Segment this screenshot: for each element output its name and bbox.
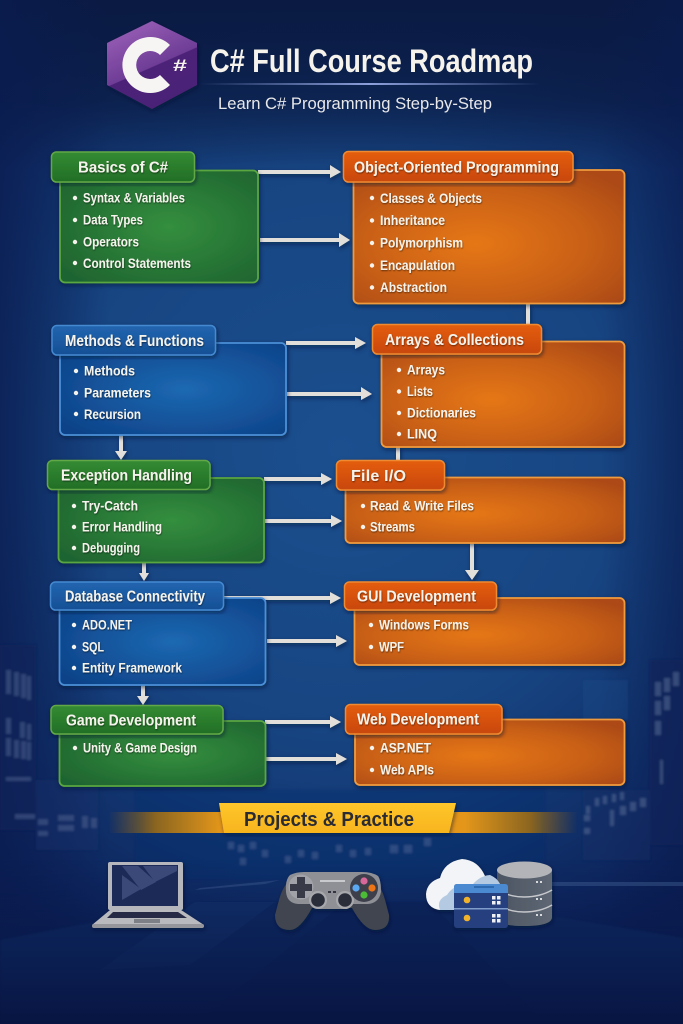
- list: Object-Oriented Programming: Abstraction: [380, 280, 447, 295]
- list: Basics of C#: Data Types: [83, 212, 143, 228]
- list: Arrays & Collections: Arrays: [407, 362, 445, 378]
- panel: GUI Development: [344, 582, 624, 665]
- panel: Methods & Functions: [52, 326, 286, 435]
- icon: laptop: [92, 862, 204, 928]
- list: Methods & Functions: Recursion: [84, 407, 141, 422]
- list: Arrays & Collections: Lists: [407, 384, 433, 399]
- icon: cloud, server and database: [426, 859, 552, 928]
- heading: Database Connectivity: [50, 582, 224, 610]
- panel: Database Connectivity: [50, 582, 266, 685]
- heading: Database Connectivity: Database Connectivity: [65, 588, 205, 606]
- panel: Basics of C#: [52, 152, 258, 282]
- heading: Web Development: [346, 704, 502, 734]
- panel: Arrays & Collections: [372, 324, 624, 447]
- list: Database Connectivity: ADO.NET: [82, 618, 133, 632]
- list: Object-Oriented Programming: Classes & Objects: [380, 191, 482, 206]
- list: File I/O: Streams: [370, 520, 415, 534]
- list: Basics of C#: Syntax & Variables: [83, 190, 185, 206]
- list: Database Connectivity: SQL: [82, 640, 104, 654]
- panel: File I/O: [336, 460, 624, 543]
- header: title and logo: [107, 21, 540, 113]
- list: File I/O: [361, 498, 474, 534]
- list: Object-Oriented Programming: Encapulation: [380, 258, 455, 273]
- list: Arrays & Collections: LINQ: [407, 426, 437, 442]
- heading: Object-Oriented Programming: Object-Oriented Programming: [354, 160, 559, 176]
- heading: Exception Handling: [48, 460, 210, 490]
- list: Web Development: ASP.NET: [380, 740, 432, 756]
- heading: Web Development: Web Development: [357, 712, 480, 728]
- heading: Object-Oriented Programming: [344, 152, 573, 182]
- icon: C# hexagon logo: #: [173, 56, 188, 75]
- list: Methods & Functions: Parameters: [84, 386, 151, 400]
- banner: Projects & Practice: [108, 803, 578, 833]
- heading: File I/O: File I/O: [351, 468, 406, 485]
- heading: Basics of C#: [52, 152, 194, 182]
- icon: cloud: [426, 859, 500, 910]
- list: Game Development: Unity & Game Design: [83, 740, 197, 756]
- list: Exception Handling: [72, 498, 162, 556]
- heading: Game Development: [51, 706, 223, 734]
- list: Arrays & Collections: [397, 362, 476, 442]
- heading: File I/O: [336, 460, 444, 490]
- list: Database Connectivity: [72, 618, 182, 676]
- heading: Game Development: Game Development: [66, 712, 197, 730]
- list: Arrays & Collections: Dictionaries: [407, 406, 476, 420]
- heading: Methods & Functions: Methods & Functions: [65, 333, 204, 350]
- icon: database cylinder: [497, 862, 552, 926]
- list: GUI Development: WPF: [379, 640, 404, 654]
- list: Basics of C#: Control Statements: [83, 256, 191, 271]
- list: Object-Oriented Programming: Inheritance: [380, 213, 445, 228]
- heading: Arrays & Collections: [372, 324, 542, 354]
- banner: Projects & Practice: Projects & Practice: [244, 809, 414, 831]
- list: Web Development: Web APIs: [380, 762, 434, 778]
- heading: Exception Handling: Exception Handling: [61, 468, 192, 484]
- list: Basics of C#: [73, 190, 191, 271]
- heading: Arrays & Collections: Arrays & Collections: [385, 332, 524, 349]
- list: File I/O: Read & Write Files: [370, 498, 474, 514]
- heading: Basics of C#: Basics of C#: [78, 160, 168, 176]
- list: Methods & Functions: Methods: [84, 364, 135, 378]
- list: Object-Oriented Programming: [370, 191, 482, 295]
- heading: GUI Development: GUI Development: [357, 588, 477, 606]
- list: Methods & Functions: [74, 364, 151, 422]
- list: Basics of C#: Operators: [83, 234, 139, 250]
- arrows between panels: [115, 165, 530, 765]
- list: Database Connectivity: Entity Framework: [82, 660, 182, 676]
- heading: Methods & Functions: [52, 326, 216, 355]
- icon: server: [454, 884, 508, 928]
- list: GUI Development: [369, 618, 469, 654]
- list: Exception Handling: Error Handling: [82, 520, 162, 534]
- panel: Exception Handling: [48, 460, 264, 562]
- icon: C# hexagon logo: [107, 21, 197, 109]
- list: Web Development: [370, 740, 434, 778]
- heading: GUI Development: [344, 582, 496, 610]
- list: Exception Handling: Debugging: [82, 540, 140, 556]
- subtitle: Learn C# Programming Step-by-Step: [218, 94, 492, 113]
- title: C# Full Course Roadmap: [210, 43, 533, 79]
- panel: Game Development: [51, 706, 266, 786]
- list: Exception Handling: Try-Catch: [82, 498, 138, 514]
- list: Object-Oriented Programming: Polymorphism: [380, 236, 463, 250]
- list: GUI Development: Windows Forms: [379, 618, 469, 632]
- icon: game controller: [275, 872, 389, 930]
- panel: Web Development: [346, 704, 624, 785]
- panel: Object-Oriented Programming: [344, 152, 624, 304]
